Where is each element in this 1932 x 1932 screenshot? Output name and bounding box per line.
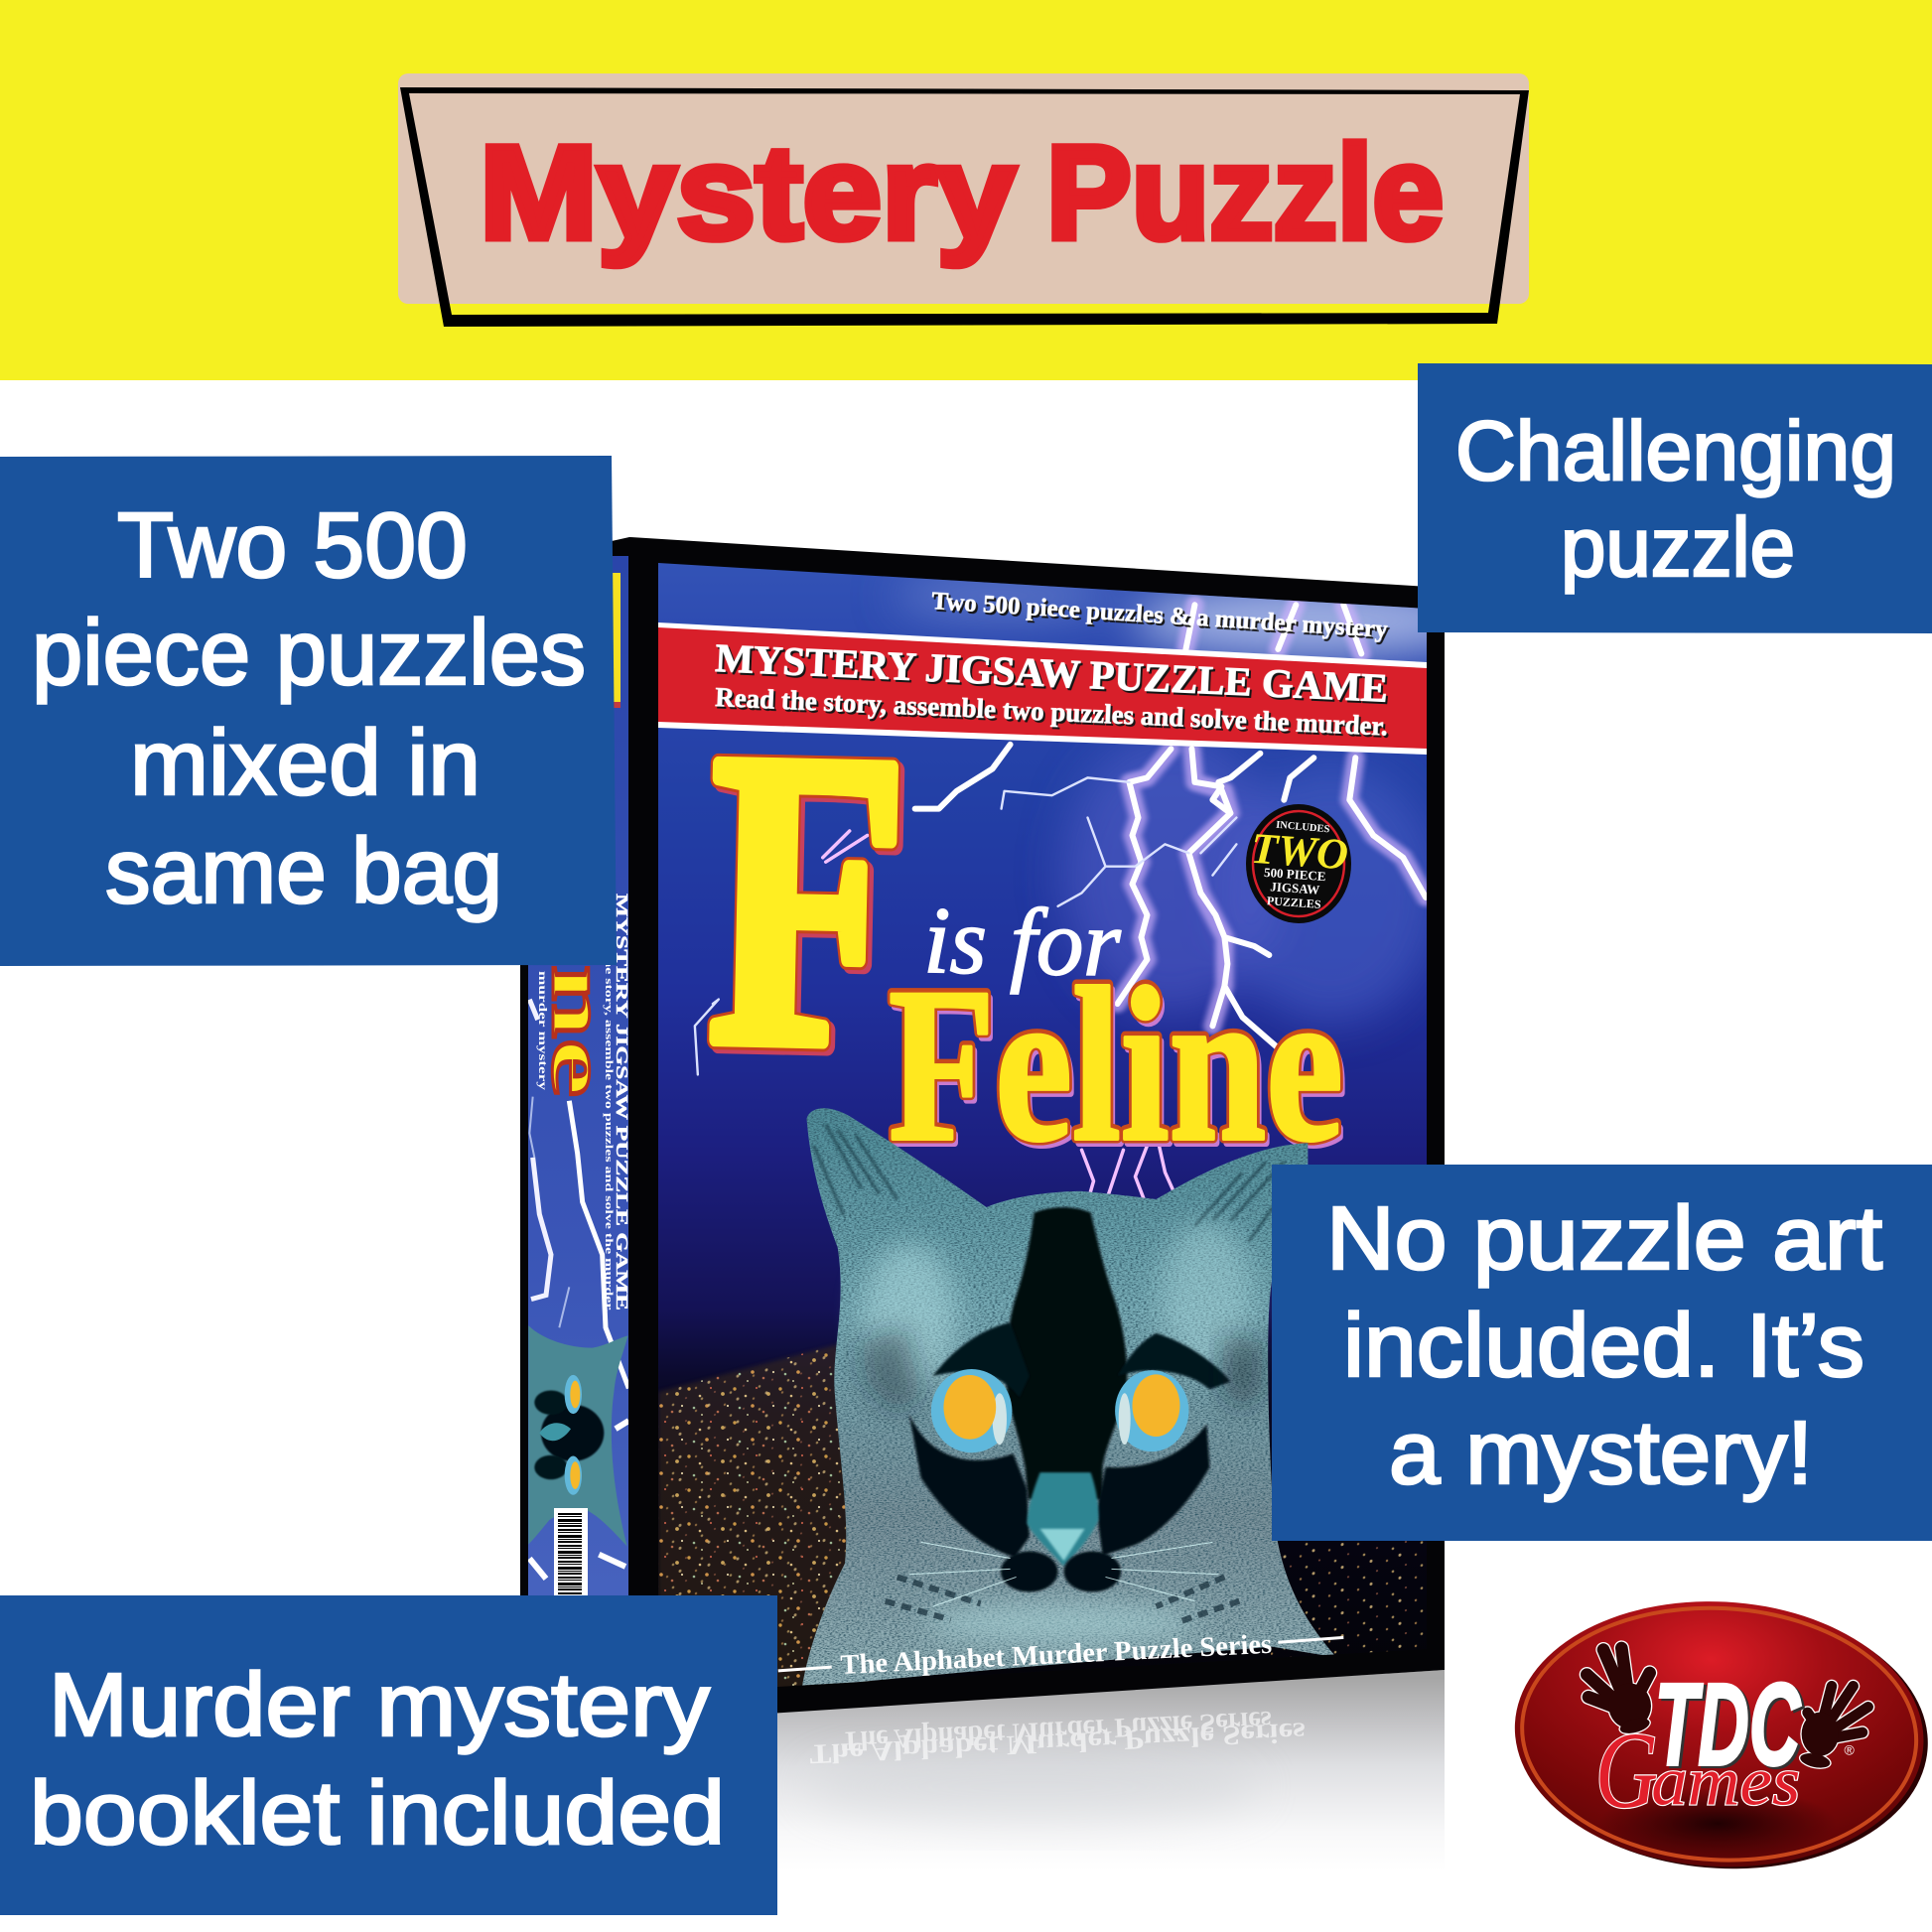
title text: Mystery xyxy=(480,119,1016,267)
Feline: Feline xyxy=(892,947,1346,1191)
big letter F xyxy=(707,753,905,1056)
Games script: ames xyxy=(1651,1743,1800,1820)
logo: TDC Games xyxy=(1508,1591,1932,1879)
ear fur streaks xyxy=(814,1124,1290,1242)
cat illustration xyxy=(778,1108,1343,1688)
callout: no puzzle art: No puzzle art xyxy=(1326,1189,1882,1289)
left eye xyxy=(931,1369,1012,1452)
callout: two 500 piece puzzles: piece puzzles xyxy=(32,601,586,704)
reflected text: The Alphabet Murder Puzzle Series xyxy=(809,1716,1307,1769)
yellow stripe xyxy=(613,573,621,702)
logo oval xyxy=(1508,1591,1930,1877)
logo bottom shading xyxy=(1598,1787,1837,1860)
callout: two 500 piece puzzles: mixed in xyxy=(130,711,481,814)
logo ring xyxy=(1516,1598,1923,1870)
Games script: G xyxy=(1595,1710,1658,1831)
box spine and front black body xyxy=(520,537,1445,1723)
barcode xyxy=(554,1508,588,1597)
registered mark: ® xyxy=(1844,1741,1855,1757)
badge: includes two: PUZZLES xyxy=(1267,894,1321,911)
callout: murder mystery booklet xyxy=(0,1595,777,1915)
spine cat xyxy=(528,1325,628,1547)
big letter F: F xyxy=(705,664,910,1135)
callout: no puzzle art xyxy=(1272,1165,1932,1541)
night sky xyxy=(658,563,1427,1579)
callout: murder mystery booklet: booklet included xyxy=(30,1764,725,1863)
title text: Puzzle xyxy=(1046,119,1444,267)
series dashes xyxy=(778,1637,1343,1671)
is for: is for xyxy=(923,887,1122,996)
logo shadow edge xyxy=(1512,1594,1932,1879)
big letter F: F xyxy=(705,664,910,1135)
callout: no puzzle art: included. It’s xyxy=(1343,1297,1864,1396)
callout: no puzzle art: a mystery! xyxy=(1389,1404,1813,1503)
lightning bolts xyxy=(695,605,1426,1212)
spine lightning and cat, in crop coordinates xyxy=(528,1000,628,1579)
forehead stripe xyxy=(1006,1207,1127,1499)
reflected cat shade xyxy=(852,1775,1212,1825)
spine art xyxy=(528,556,628,1595)
dark markings around eyes xyxy=(909,1414,1030,1557)
right hand xyxy=(1797,1686,1868,1772)
series caption: The Alphabet Murder Puzzle Series xyxy=(840,1629,1273,1681)
cat head xyxy=(802,1108,1336,1688)
TDC wordmark: TDC xyxy=(1657,1661,1804,1792)
big letter F: F xyxy=(709,668,914,1139)
banner subheading: Read the story, assemble two puzzles and solve the murder. xyxy=(715,682,1388,742)
callout: challenging puzzle: Challenging xyxy=(1455,404,1896,497)
cheek markings xyxy=(886,1577,1239,1622)
tan panel xyxy=(398,73,1529,304)
Feline: Feline xyxy=(889,943,1343,1187)
front cover art xyxy=(658,556,1489,1698)
title text xyxy=(480,119,1444,267)
badge: includes two: JIGSAW xyxy=(1270,879,1320,897)
black trapezoid frame xyxy=(400,87,1529,327)
clouds xyxy=(894,574,1489,1023)
city lights xyxy=(658,1344,1430,1698)
nose xyxy=(1027,1472,1099,1567)
badge: includes two: INCLUDES xyxy=(1276,820,1330,835)
badge: includes two xyxy=(1246,804,1351,923)
reflected text xyxy=(810,1712,1305,1763)
Feline: Feline xyxy=(889,942,1343,1186)
badge: includes two: TWO xyxy=(1250,824,1349,879)
spine title letters: ne xyxy=(536,965,622,1097)
spine subtitle: the story, assemble two puzzles and solve the murder. xyxy=(603,953,615,1312)
muzzle xyxy=(1001,1552,1058,1592)
pale fur around eyes xyxy=(862,1242,957,1392)
callout: two 500 piece puzzles: same bag xyxy=(105,819,502,922)
top tagline: Two 500 piece puzzles & a murder mystery xyxy=(931,588,1389,643)
reflection of box xyxy=(777,1670,1445,1847)
red banner xyxy=(658,622,1427,755)
title banner xyxy=(398,73,1529,327)
logo: TDC Games: TDC xyxy=(1655,1659,1801,1790)
left hand xyxy=(1587,1648,1653,1737)
Games script xyxy=(1595,1710,1800,1831)
spine game name: MYSTERY JIGSAW PUZZLE GAME xyxy=(613,894,631,1311)
banner heading: MYSTERY JIGSAW PUZZLE GAME xyxy=(715,635,1389,711)
callout: two 500 piece puzzles: Two 500 xyxy=(117,493,468,597)
spine tagline: murder mystery xyxy=(536,971,550,1090)
callout: challenging puzzle: puzzle xyxy=(1561,500,1795,594)
whiskers xyxy=(909,1542,1218,1606)
right eye xyxy=(1115,1370,1188,1451)
puzzle box xyxy=(496,537,1489,1723)
callout: murder mystery booklet: Murder mystery xyxy=(49,1656,710,1755)
white gap left of spine xyxy=(496,966,520,1601)
reflected text: The Alphabet Murder Puzzle Series xyxy=(841,1705,1273,1756)
yellow header band xyxy=(0,0,1932,380)
callout: challenging puzzle xyxy=(1418,363,1932,633)
badge: includes two: 500 PIECE xyxy=(1264,865,1326,884)
callout: two 500 piece puzzles xyxy=(0,456,617,966)
